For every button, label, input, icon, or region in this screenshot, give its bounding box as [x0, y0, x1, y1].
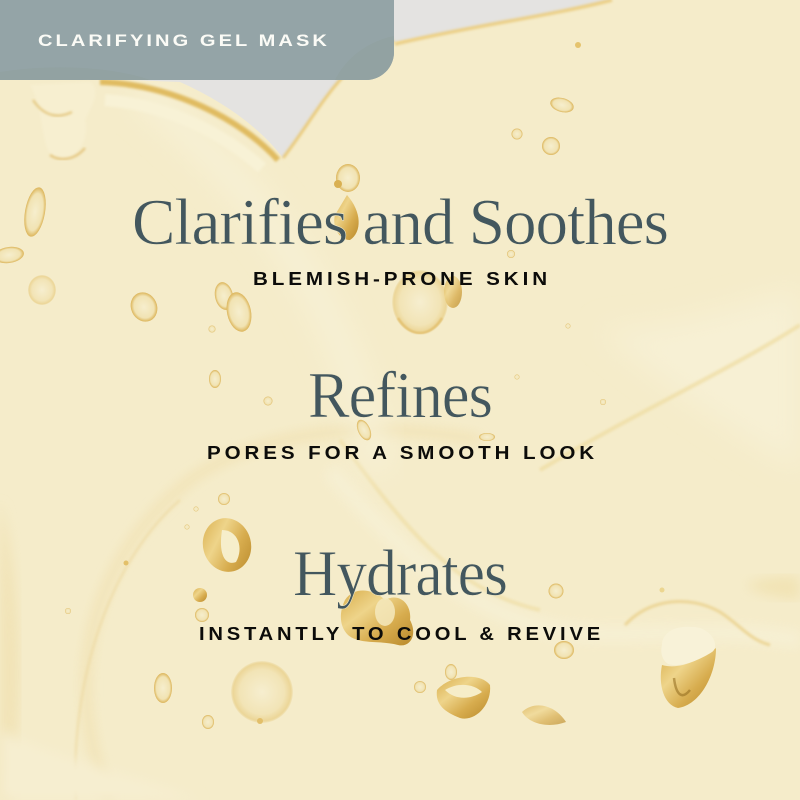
subheading: blemish-prone skin: BLEMISH-PRONE SKIN	[253, 269, 551, 289]
heading: clarifies and soothes: Clarifies and Soothes	[132, 186, 668, 259]
subheading: instantly: INSTANTLY TO COOL & REVIVE	[199, 624, 604, 644]
heading: refines: Refines	[308, 359, 492, 432]
gray backdrop notch above the gel	[130, 0, 612, 158]
header banner	[0, 0, 394, 80]
subheading: pores: PORES FOR A SMOOTH LOOK	[207, 443, 598, 463]
gel upper edge highlight	[100, 0, 612, 168]
banner label: CLARIFYING GEL MASK	[38, 31, 330, 50]
heading: hydrates: Hydrates	[293, 537, 507, 610]
